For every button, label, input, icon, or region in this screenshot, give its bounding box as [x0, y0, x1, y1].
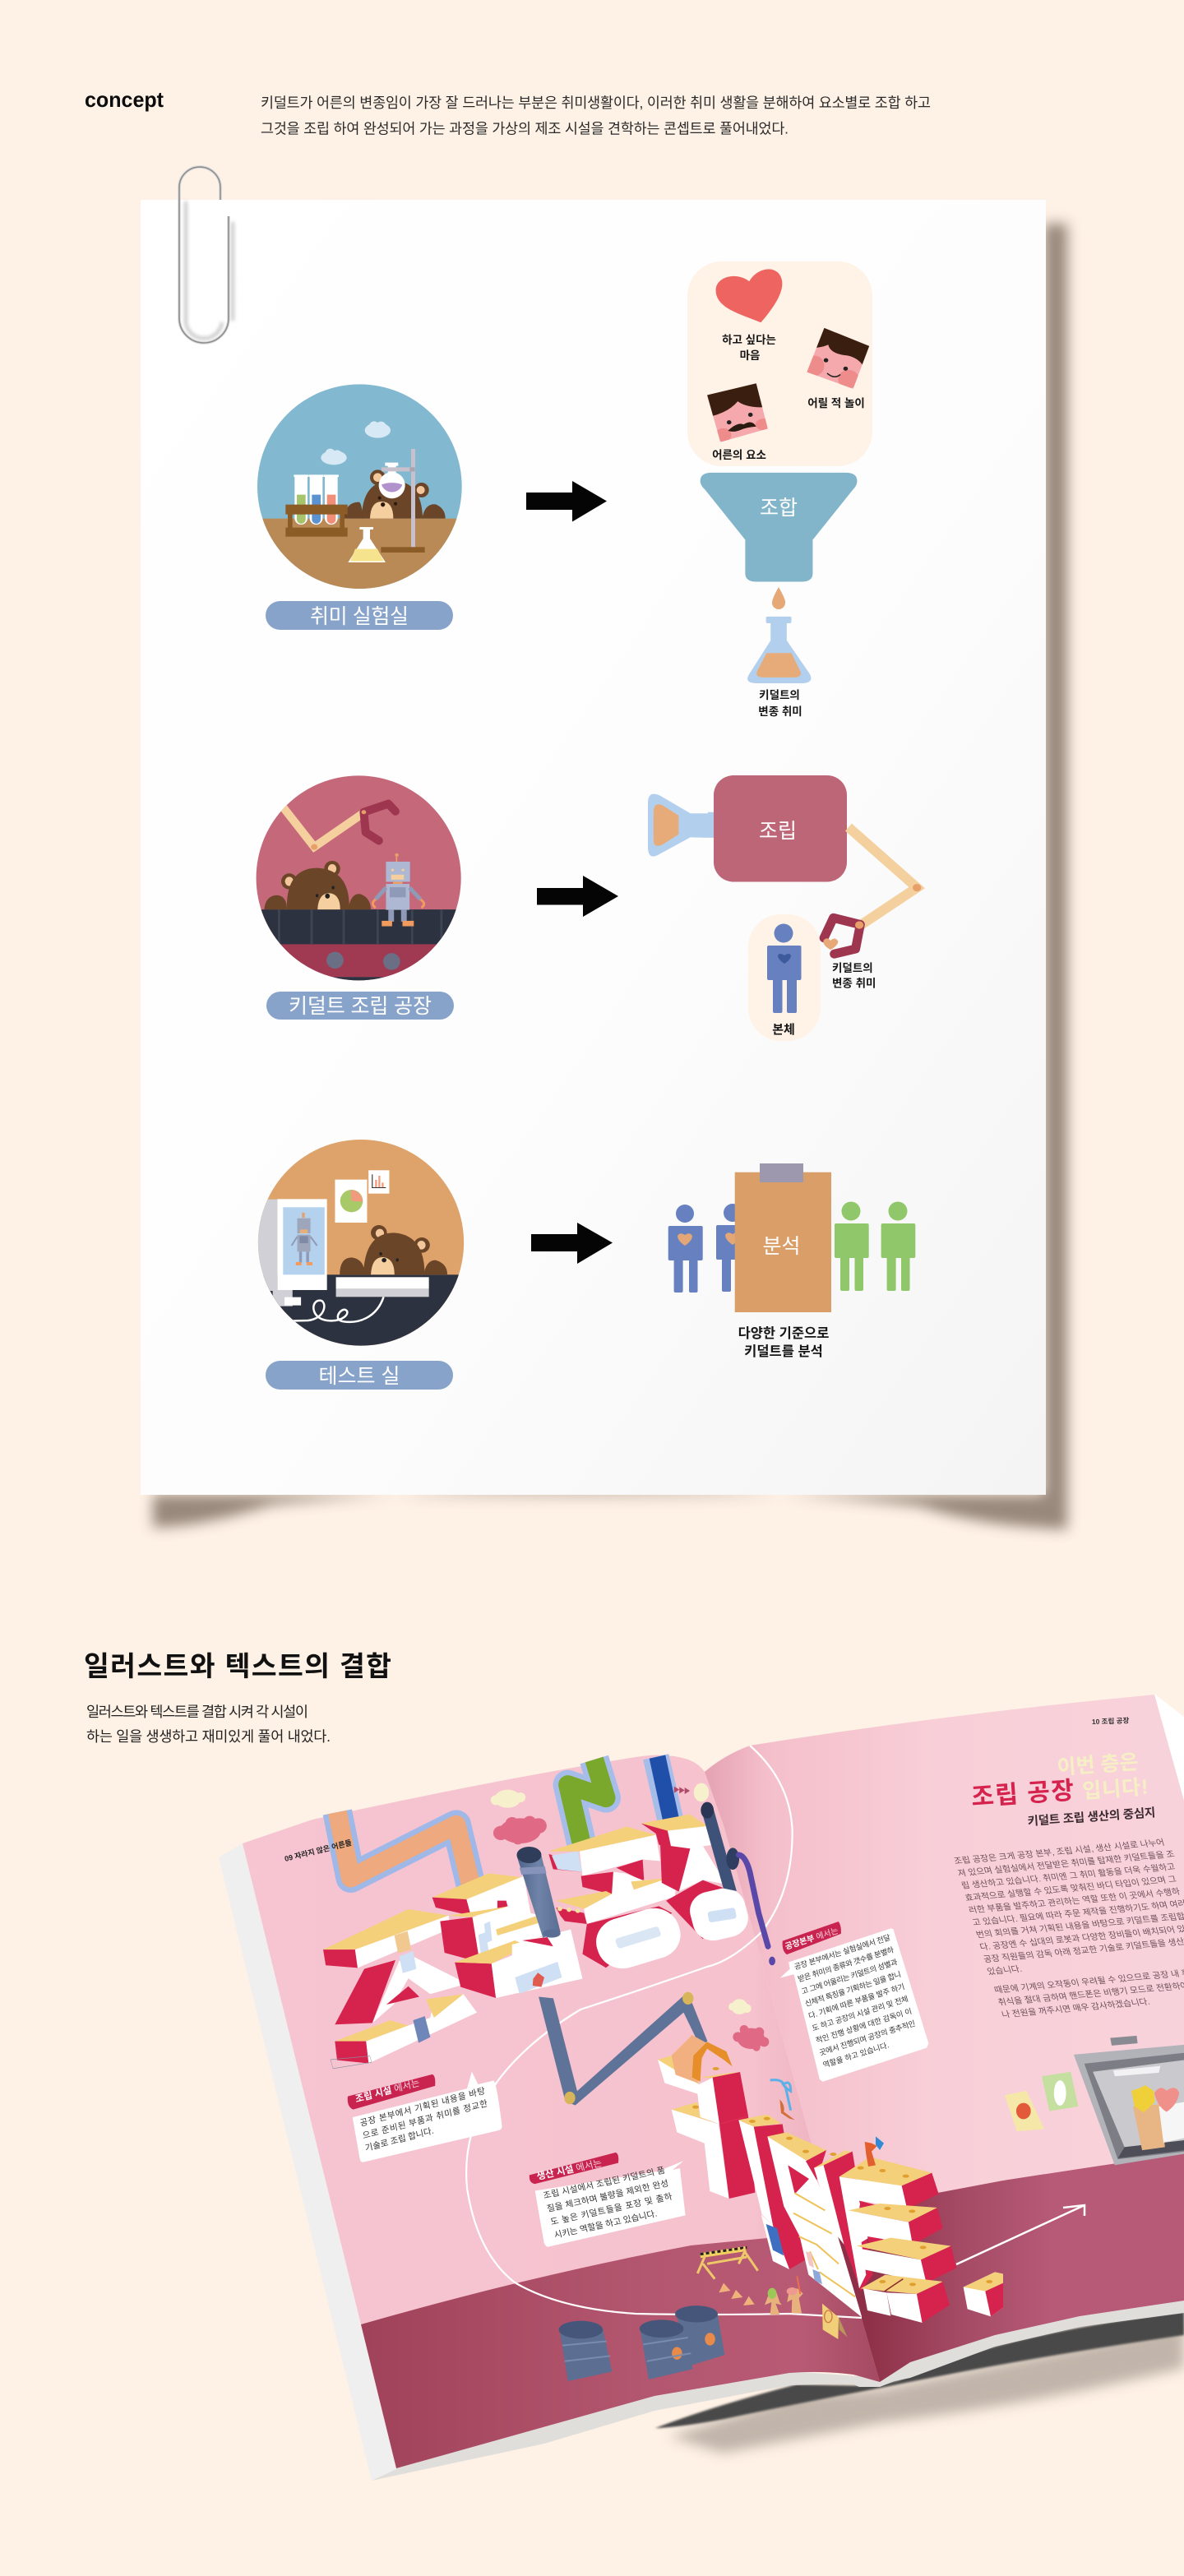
callout: assembly facility: 공장 본부에서 기획된 내용을 바탕	[359, 2086, 486, 2129]
heart caption: 마음	[740, 349, 760, 362]
callout: production facility: 조립 시설에서 조립된 키덜트의 품	[542, 2165, 667, 2201]
letter 공	[548, 1827, 687, 1975]
scene 3: test room circle	[254, 1140, 466, 1348]
callout: factory headquarters: 도 하고 공장의 시설 관리 및 전체	[811, 1994, 909, 2033]
callout: factory headquarters: 신체적 특징을 기획하는 일을 합니	[804, 1969, 902, 2008]
right page title: 이번 층은	[1057, 1750, 1139, 1779]
robot arm on spread	[539, 1992, 707, 2105]
icon: person with heart	[767, 924, 801, 1013]
body panel	[748, 914, 821, 1041]
section description	[86, 1704, 331, 1745]
callout: assembly facility	[348, 2072, 502, 2162]
analysis group	[668, 1163, 915, 1359]
icon: adult face	[707, 383, 768, 442]
callout: factory headquarters: 곳에서 진행되며 공장의 중추적인	[818, 2019, 916, 2057]
machine pipes	[516, 1802, 775, 2105]
callout: factory headquarters: 공장 본부에서는 실험실에서 전달	[793, 1932, 891, 1972]
callout: factory headquarters: 고 그에 어울리는 키덜트의 성별과	[800, 1957, 899, 1996]
right page body copy: 나 전원을 꺼주시면 매우 감사하겠습니다.	[1001, 1996, 1151, 2020]
machine nozzle	[648, 794, 715, 857]
paper sheet	[141, 200, 1046, 1495]
blue people with hearts	[668, 1204, 742, 1293]
callout: assembly facility: 으로 준비된 부품과 취미를 정교한	[362, 2098, 488, 2141]
scene 3 label pill: 테스트 실	[319, 1365, 400, 1388]
block letters: 조립 공장	[323, 1815, 752, 2069]
paper clip	[179, 167, 233, 343]
left page floor	[361, 2233, 880, 2468]
right page floor	[822, 2153, 1184, 2382]
robot arm	[823, 827, 921, 954]
analysis caption	[738, 1325, 829, 1359]
magazine ground shadow	[655, 2312, 1184, 2453]
callout: factory headquarters: 받은 취미의 종류와 갯수를 분별하	[797, 1945, 895, 1983]
machine body: 조립	[759, 820, 797, 843]
clipboard: 분석	[762, 1235, 801, 1258]
heart caption: 하고 싶다는	[722, 334, 776, 346]
left page	[243, 1755, 880, 2468]
right page body copy: 효과적으로 실행할 수 있도록 맞춰진 바디 타입이 있으며 그	[964, 1874, 1177, 1903]
hobby part caption: 키덜트의	[832, 962, 873, 974]
right page body copy: 립 생산하고 있습니다. 취미엔 그 취미 활동을 더욱 수월하고	[960, 1861, 1177, 1891]
section description: 일러스트와 텍스트를 결합 시켜 각 시설이	[86, 1704, 308, 1720]
lower block letters: 시설	[658, 1999, 1003, 2339]
letter 조	[323, 1909, 477, 2069]
scene 2: kidult assembly factory circle	[254, 775, 466, 982]
white cover spine	[219, 1843, 396, 2481]
grey pipe	[516, 1847, 561, 1938]
scene 2 label pill: 키덜트 조립 공장	[289, 995, 432, 1018]
right page title: 키덜트 조립 생산의 중심지	[1027, 1806, 1156, 1829]
arrow 2	[537, 876, 618, 917]
coloured tubes	[337, 1757, 709, 1885]
clipboard	[735, 1163, 831, 1312]
arrow 3	[531, 1223, 613, 1264]
scene 3 label pill	[266, 1361, 453, 1390]
analysis caption: 다양한 기준으로	[738, 1325, 829, 1341]
right page body copy	[953, 1835, 1184, 2020]
page stack edge	[372, 2299, 1184, 2481]
flask caption: 변종 취미	[758, 705, 802, 718]
flask caption: 키덜트의	[759, 689, 800, 701]
icon: heart	[716, 269, 782, 322]
section heading: 일러스트와 텍스트의 결합	[84, 1652, 391, 1682]
section description: 하는 일을 생생하고 재미있게 풀어 내었다.	[86, 1728, 331, 1745]
callout: assembly facility: 기술로 조립 합니다.	[364, 2125, 435, 2153]
letter 장	[641, 1815, 752, 1945]
callout: production facility: 생산 시설 에서는	[535, 2157, 603, 2182]
white route line	[466, 1746, 862, 2318]
concept description	[261, 95, 931, 136]
concept description: 그것을 조립 하여 완성되어 가는 과정을 가상의 제조 시설을 견학하는 콘셉트로 풀어내었다.	[261, 120, 789, 136]
hobby part caption	[832, 962, 876, 990]
funnel: combine: 조합	[760, 497, 798, 520]
flask caption	[758, 689, 802, 718]
callout: factory headquarters: 공장본부 에서는	[784, 1926, 839, 1952]
right page body copy: 있습니다.	[986, 1964, 1023, 1977]
left page header: 09 자라지 않은 어른들	[284, 1838, 353, 1863]
hobby part caption: 변종 취미	[832, 977, 876, 990]
arrow 1	[526, 481, 607, 521]
callout: production facility: 도 높은 키덜트들을 포장 및 출하	[549, 2191, 673, 2227]
right page title: 입니다!	[1081, 1775, 1149, 1803]
heart caption	[722, 334, 776, 362]
elevator and posters	[1005, 2036, 1184, 2165]
callout: production facility: 질을 체크하며 불량을 제외한 완성	[546, 2178, 670, 2214]
callout: production facility: 시키는 역할을 하고 있습니다.	[553, 2208, 659, 2241]
callout: production facility	[530, 2153, 686, 2247]
right page body copy: 조립 공장은 크게 공장 본부, 조립 시설, 생산 시설로 나누어	[953, 1837, 1166, 1866]
right page body copy: 러한 부품을 발주하고 관리하는 역할 또한 이 곳에서 수행하	[968, 1886, 1182, 1916]
right page body copy: 고 있습니다. 필요에 따라 주문 제작을 진행하기도 하며 여러	[971, 1898, 1184, 1928]
callout: assembly facility: 조립 시설 에서는	[354, 2078, 420, 2105]
concept description: 키덜트가 어른의 변종임이 가장 잘 드러나는 부분은 취미생활이다, 이러한 취미 생활을 분해하여 요소별로 조합 하고	[261, 95, 931, 111]
callout: factory headquarters: 역할을 하고 있습니다.	[821, 2040, 890, 2070]
assembly machine	[648, 775, 921, 954]
right page title	[970, 1750, 1156, 1829]
hazard barrels	[559, 2305, 724, 2381]
callout: factory headquarters: 다. 기획에 따른 부품을 발주 하기	[807, 1982, 905, 2020]
callout: factory headquarters	[780, 1922, 928, 2082]
green people	[835, 1202, 915, 1291]
letter 립	[432, 1873, 582, 1998]
scene 1 label pill	[266, 601, 453, 630]
right page body copy: 져 있으며 실험실에서 전달받은 취미를 탑재한 키덜트들을 조	[956, 1850, 1176, 1879]
right page white edge	[1154, 1694, 1184, 1809]
right page header: 10 조립 공장	[1092, 1716, 1130, 1726]
body caption: 본체	[772, 1023, 795, 1037]
icon: child face	[807, 327, 870, 389]
icon: drop	[772, 587, 785, 609]
scene 1: hobby laboratory circle	[257, 384, 462, 589]
right page	[705, 1695, 1184, 2382]
machine body	[714, 775, 847, 881]
dark pipe with purple drip	[701, 1802, 775, 1965]
paper shadow	[153, 224, 1067, 1529]
magazine mockup	[219, 1694, 1184, 2481]
adult caption: 어른의 요소	[712, 449, 766, 461]
elements panel	[687, 261, 873, 466]
child caption: 어릴 적 놀이	[807, 397, 865, 409]
analysis caption: 키덜트를 분석	[744, 1343, 823, 1359]
callout: factory headquarters: 적인 진행 상황에 대한 감독이 이	[815, 2006, 913, 2045]
icon: flask with result	[747, 617, 811, 683]
route arrow	[956, 2205, 1085, 2264]
scene 1 label pill: 취미 실험실	[310, 605, 409, 628]
right page title: 조립 공장	[970, 1777, 1075, 1811]
concept label: concept	[85, 87, 164, 112]
scene 2 label pill	[266, 992, 454, 1020]
funnel: combine	[701, 473, 857, 582]
